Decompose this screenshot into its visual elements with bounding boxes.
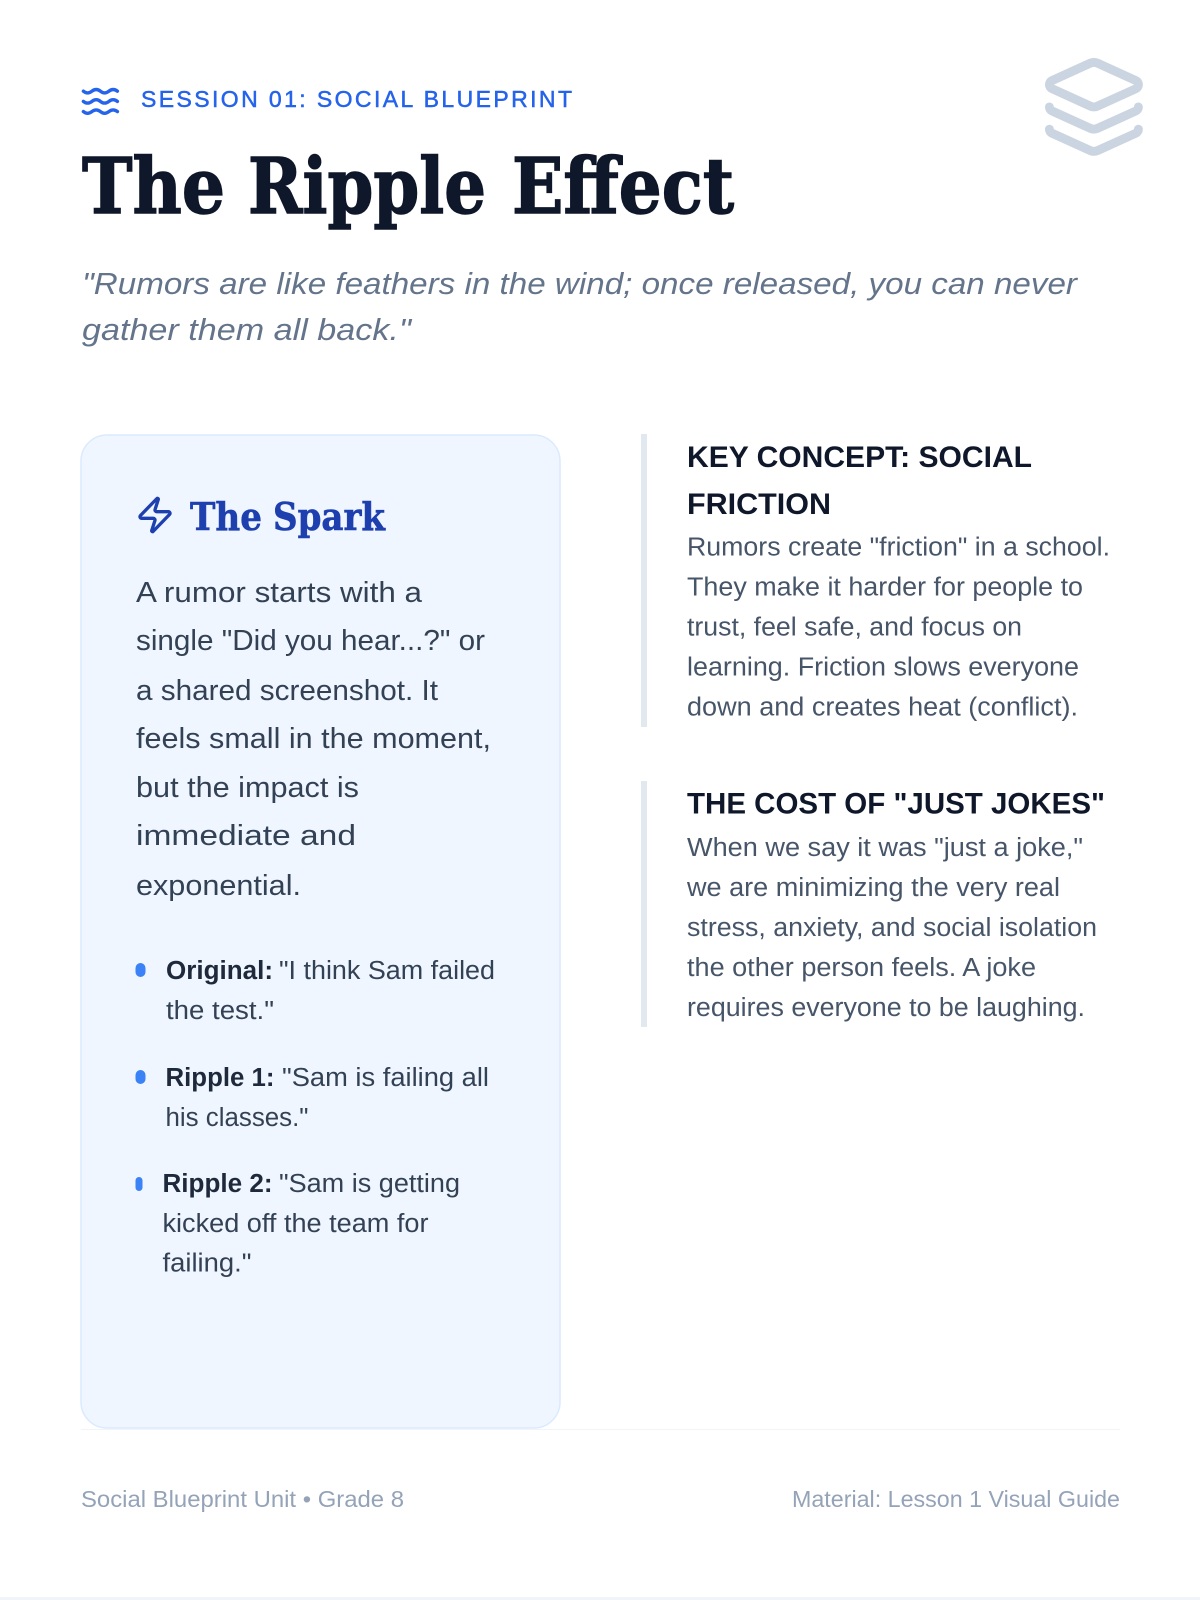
footer right text: Material: Lesson 1 Visual Guide: [792, 1486, 1120, 1512]
panel: key concept: [641, 434, 1110, 727]
list item: ripple 1: "Sam is failing all: [282, 1064, 489, 1092]
list item: ripple 1: Ripple 1:: [166, 1064, 274, 1092]
icon: layers: [1049, 62, 1138, 151]
panel body text: immediate and: [136, 820, 356, 852]
heading: key concept: KEY CONCEPT: SOCIAL: [687, 441, 1032, 474]
footer left text: Social Blueprint Unit • Grade 8: [81, 1486, 404, 1512]
text: key concept: learning. Friction slows everyone: [687, 654, 1079, 682]
panel body text: exponential.: [136, 870, 301, 902]
panel body text: [136, 577, 491, 902]
text: key concept: Rumors create "friction" in a school.: [687, 534, 1110, 562]
text: cost of just jokes: When we say it was "just a joke,": [687, 834, 1083, 862]
eyebrow: session label: SESSION 01: SOCIAL BLUEPRINT: [141, 86, 572, 112]
header: [82, 62, 1138, 347]
icon: lightning bolt: [140, 498, 170, 532]
list item: original: the test.": [166, 997, 274, 1025]
list item: original: [136, 957, 495, 1025]
panel body text: but the impact is: [136, 772, 359, 804]
title: Effect: [512, 142, 734, 232]
list item: ripple 2: [136, 1170, 460, 1278]
footer: [81, 1429, 1120, 1512]
list item: ripple 2: kicked off the team for: [162, 1210, 429, 1238]
panel body text: A rumor starts with a: [136, 577, 423, 609]
text: key concept: down and creates heat (conflict).: [687, 694, 1078, 722]
panel heading: [190, 494, 386, 539]
text: key concept: [687, 534, 1110, 722]
text: cost of just jokes: [686, 834, 1097, 1022]
heading: key concept: [687, 441, 1032, 521]
panel body text: single "Did you hear...?" or: [136, 625, 485, 657]
title: Ripple: [248, 142, 486, 232]
panel heading: The: [190, 494, 262, 539]
list item: ripple 2: "Sam is getting: [279, 1170, 460, 1198]
text: key concept: trust, feel safe, and focus on: [687, 614, 1022, 642]
list item: ripple 1: his classes.": [166, 1104, 308, 1132]
list item: ripple 1: [136, 1064, 489, 1132]
quote: "Rumors are like feathers in the wind; once released, you can never: [82, 266, 1079, 301]
panel body text: feels small in the moment,: [136, 723, 491, 755]
text: key concept: They make it harder for people to: [687, 574, 1083, 602]
panel: cost of just jokes: [641, 781, 1105, 1027]
list item: original: Original:: [166, 957, 273, 985]
heading: cost of just jokes: THE COST OF "JUST JOKES": [687, 788, 1105, 820]
title: [82, 142, 734, 232]
list item: original: "I think Sam failed: [279, 957, 495, 985]
list item: ripple 2: Ripple 2:: [162, 1170, 272, 1198]
panel: the spark: [81, 435, 560, 1428]
panel heading: Spark: [273, 494, 386, 539]
title: The: [82, 142, 225, 232]
text: cost of just jokes: we are minimizing the very real: [686, 874, 1060, 902]
text: cost of just jokes: requires everyone to be laughing.: [687, 994, 1085, 1022]
heading: key concept: FRICTION: [687, 488, 831, 521]
text: cost of just jokes: stress, anxiety, and social isolation: [687, 914, 1097, 942]
quote: [82, 266, 1079, 347]
text: cost of just jokes: the other person feels. A joke: [687, 954, 1036, 982]
quote: gather them all back.": [82, 312, 413, 347]
panel body text: a shared screenshot. It: [136, 675, 438, 707]
icon: waves: [83, 90, 117, 113]
list item: ripple 2: failing.": [162, 1250, 252, 1278]
